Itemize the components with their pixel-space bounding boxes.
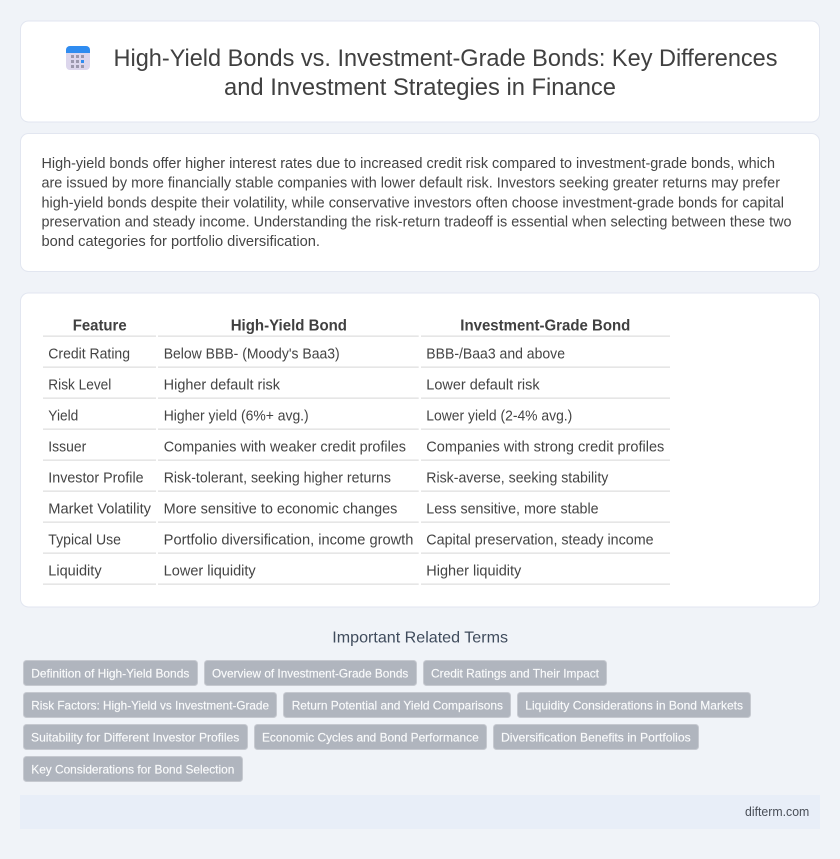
row: investor profile: Risk-averse, seeking stability: [426, 470, 609, 486]
tag: Risk Factors: High-Yield vs Investment-Grade: [31, 698, 269, 712]
row: liquidity: Lower liquidity: [164, 563, 257, 579]
row: investor profile: Investor Profile: [48, 470, 144, 486]
text block: summary: preservation and steady income. Understanding the risk-return tradeoff is essential when selecting between these two: [42, 214, 792, 230]
row: investor profile: Risk-tolerant, seeking higher returns: [164, 470, 391, 486]
tag: Diversification Benefits in Portfolios: [501, 730, 691, 744]
tag: [284, 692, 510, 718]
heading: important related terms: Important Related Terms: [332, 630, 508, 647]
row: typical use: Capital preservation, steady income: [426, 532, 654, 548]
row: market volatility: More sensitive to economic changes: [164, 501, 397, 517]
tag: Economic Cycles and Bond Performance: [262, 730, 479, 744]
text block: summary: bond categories for portfolio diversification.: [42, 234, 320, 250]
row: liquidity: [48, 563, 522, 579]
tag: Definition of High-Yield Bonds: [31, 666, 189, 680]
text block: summary: high-yield bonds despite their volatility, while conservative investors often choose investment-grade bonds for capital: [42, 195, 784, 211]
title: and Investment Strategies in Finance: [224, 74, 616, 101]
tag: Overview of Investment-Grade Bonds: [212, 666, 408, 680]
row: risk level: Lower default risk: [426, 377, 540, 393]
tag: [24, 692, 276, 718]
row: credit rating: BBB-/Baa3 and above: [426, 346, 565, 362]
tag: [494, 724, 698, 750]
panel: summary paragraph: [20, 134, 820, 272]
table header row: Feature: [73, 318, 127, 335]
tag: [24, 724, 248, 750]
icon: calendar grid: [66, 46, 90, 70]
row: risk level: Higher default risk: [164, 377, 281, 393]
row: liquidity: Liquidity: [48, 563, 102, 579]
tag: Suitability for Different Investor Profiles: [31, 730, 239, 744]
row: credit rating: Below BBB- (Moody's Baa3): [164, 346, 340, 362]
row: typical use: [48, 532, 654, 548]
row: yield: [48, 408, 572, 424]
row: issuer: Companies with weaker credit profiles: [164, 439, 406, 455]
text block: summary: High-yield bonds offer higher interest rates due to increased credit risk compared to investment-grade bonds, which: [42, 156, 775, 172]
row: liquidity: Higher liquidity: [426, 563, 522, 579]
row: risk level: [48, 377, 540, 393]
tag: [254, 724, 486, 750]
table header row: [73, 318, 630, 335]
table header row: Investment-Grade Bond: [460, 318, 630, 335]
tag: [424, 660, 606, 686]
row: typical use: Typical Use: [48, 532, 121, 548]
text block: summary: are issued by more financially stable companies with lower default risk. Investors seeking greater returns may prefer: [42, 176, 780, 192]
footer bar: [20, 795, 820, 829]
row: investor profile: [48, 470, 609, 486]
row: yield: Yield: [48, 408, 78, 424]
tag: Key Considerations for Bond Selection: [31, 762, 234, 776]
tag: [24, 660, 198, 686]
tag: Credit Ratings and Their Impact: [431, 666, 600, 680]
row: credit rating: Credit Rating: [48, 346, 130, 362]
panel: comparison table: [20, 293, 820, 607]
panel: title header: [20, 21, 820, 122]
row: credit rating: [48, 346, 565, 362]
panel: related term tags: [24, 660, 750, 782]
row: market volatility: Less sensitive, more stable: [426, 501, 599, 517]
row: risk level: Risk Level: [48, 377, 111, 393]
row: yield: Lower yield (2-4% avg.): [426, 408, 572, 424]
tag: [24, 756, 242, 782]
tag: [518, 692, 750, 718]
tag: Return Potential and Yield Comparisons: [292, 698, 503, 712]
row: issuer: [48, 439, 664, 455]
row: issuer: Issuer: [48, 439, 86, 455]
row: market volatility: [48, 501, 599, 517]
tag: Liquidity Considerations in Bond Markets: [525, 698, 743, 712]
row: market volatility: Market Volatility: [48, 501, 152, 517]
table header row: High-Yield Bond: [231, 318, 347, 335]
footer bar: difterm.com: [745, 804, 809, 819]
row: issuer: Companies with strong credit profiles: [426, 439, 664, 455]
tag: [204, 660, 416, 686]
title: High-Yield Bonds vs. Investment-Grade Bonds: Key Differences: [114, 45, 778, 72]
text block: summary: [42, 156, 792, 250]
row: typical use: Portfolio diversification, income growth: [164, 532, 413, 548]
row: yield: Higher yield (6%+ avg.): [164, 408, 309, 424]
title: [114, 45, 778, 101]
